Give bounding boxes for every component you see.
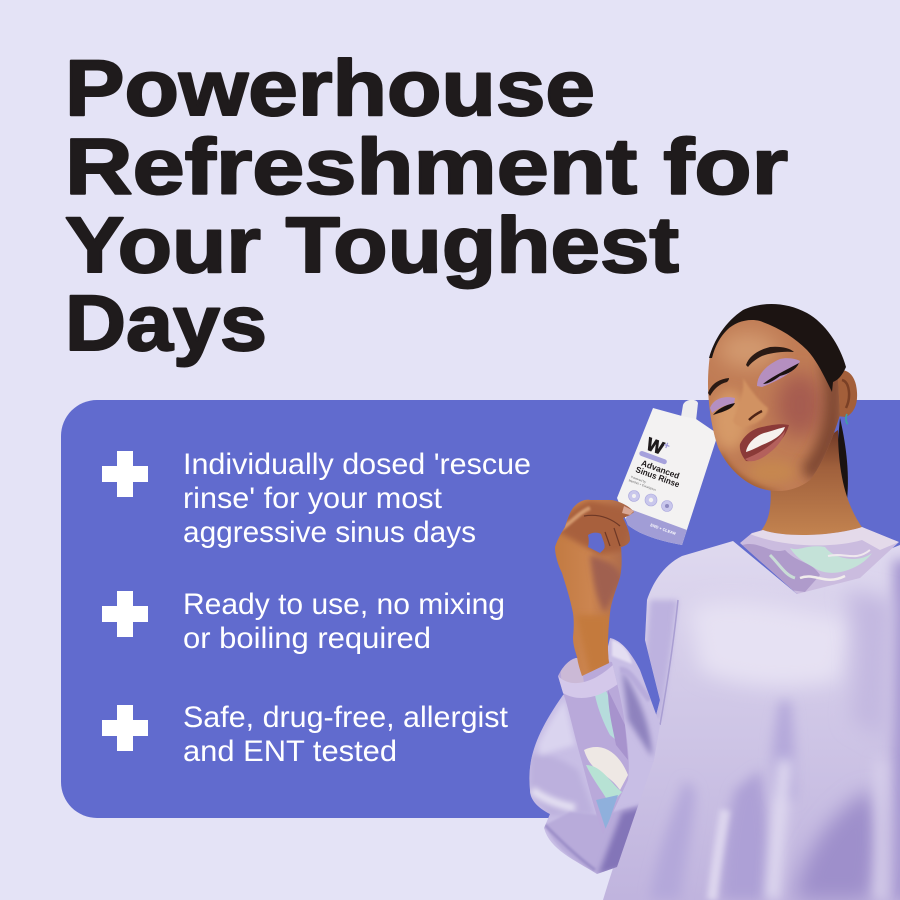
icon: plus 1 <box>102 451 148 497</box>
mouth <box>740 424 789 461</box>
pouch band <box>626 510 687 545</box>
pouch title: Powered by <box>630 475 647 484</box>
far sleeve puff <box>529 638 660 875</box>
ear <box>833 370 857 417</box>
title: Refreshment for <box>65 122 788 210</box>
right eye makeup <box>757 358 800 387</box>
left eye makeup <box>710 397 735 415</box>
pouch nozzle <box>681 400 698 421</box>
text: benefit 3 <box>183 701 508 768</box>
icon: plus 3 <box>102 705 148 751</box>
text: benefit 3: Safe, drug-free, allergist <box>183 701 508 734</box>
text: benefit 1: aggressive sinus days <box>183 516 476 549</box>
nose <box>733 378 768 427</box>
title: Your Toughest <box>65 200 679 289</box>
product pouch: END + CLEAR <box>650 522 677 536</box>
pouch logo <box>639 432 674 465</box>
earring <box>846 414 848 424</box>
benefit 1 <box>102 448 531 549</box>
right eyebrow <box>746 347 794 367</box>
face <box>700 304 857 500</box>
patterned collar <box>740 527 899 594</box>
product pouch <box>617 400 718 547</box>
icon: plus 2 <box>102 591 148 637</box>
pouch title: Menthol + Eucalyptus <box>628 478 657 492</box>
neck <box>760 430 864 538</box>
pouch logo: + <box>661 439 672 453</box>
panel: benefits <box>61 400 900 818</box>
left eyebrow <box>708 378 729 396</box>
pouch title <box>628 456 684 499</box>
text: benefit 3: and ENT tested <box>183 735 397 768</box>
finger hole <box>588 533 605 553</box>
title: Days <box>65 278 267 367</box>
braid <box>837 418 848 500</box>
title: Powerhouse <box>65 43 595 132</box>
text: benefit 2: or boiling required <box>183 622 431 655</box>
sweater body <box>603 541 900 900</box>
pouch title: Advanced <box>640 458 681 481</box>
text: benefit 1 <box>183 448 531 549</box>
hand <box>555 500 635 676</box>
text: benefit 1: Individually dosed 'rescue <box>183 448 531 481</box>
patterned cuff <box>558 658 629 828</box>
text: benefit 2 <box>183 588 505 655</box>
title <box>65 43 788 367</box>
hair <box>709 304 846 392</box>
text: benefit 2: Ready to use, no mixing <box>183 588 505 621</box>
person holding product <box>529 304 900 900</box>
benefit 2 <box>102 588 505 655</box>
pouch body <box>617 408 718 545</box>
pouch logo: W <box>644 434 667 458</box>
text: benefit 1: rinse' for your most <box>183 482 442 515</box>
pouch title: Sinus Rinse <box>634 464 681 489</box>
pouch icons <box>628 490 672 512</box>
benefit 3 <box>102 701 508 768</box>
